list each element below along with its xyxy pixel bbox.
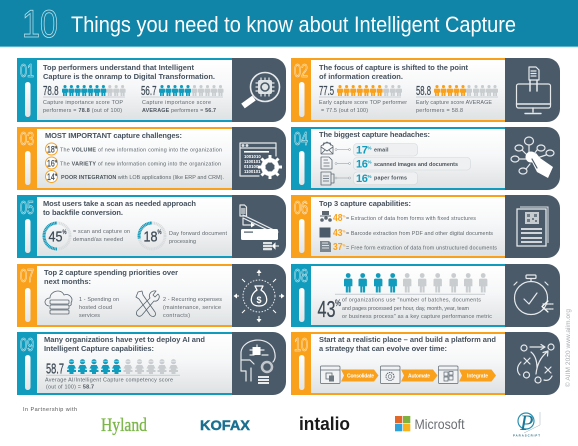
challenge 14%: POOR INTEGRATION with LOB applications (like ERP and CRM). [61,175,224,181]
donut 45% [44,223,130,249]
donut 18%: processing [169,239,196,245]
heading 07 [44,268,178,286]
headache: scanned images [321,157,470,170]
step: consolidate [320,366,378,384]
capability 48%: = Extraction of data from forms with fixed structures [346,216,476,222]
stat 58.8 pictogram: 58.8 [416,83,431,98]
challenge 18%: 18 [47,144,58,156]
capability 43%: = Barcode extraction from PDF and other digital documents [346,231,493,237]
headache: scanned images: % [367,160,372,164]
stat 77.5 pictogram: = 77.5 (out of 100) [321,108,368,114]
priority 2: wrench and screwdriver: 2 - Recurring expenses [163,297,222,303]
panel 03 [17,127,286,190]
heading 03: MOST IMPORTANT capture challenges: [45,131,182,140]
pictogram: 4.3 of 10 people [335,273,487,295]
heading 05 [43,199,196,217]
stat 43%: 43 [318,296,336,322]
step: consolidate: Consolidate [347,373,374,379]
logo: Microsoft: Microsoft [414,416,465,432]
donut 18%: 18 [144,228,158,246]
icon: code window and gear: 1100101 [244,159,261,164]
icon: hand touching nodes [511,137,554,178]
logo: Intalio: intalio [299,414,350,434]
donut 45%: demand/as needed [73,237,123,243]
priority 1: cloud services: services [79,313,100,319]
step: integrate [438,366,496,384]
challenge 18%: The VOLUME of new information coming into the organization [60,148,222,154]
donut 18% [139,223,228,249]
heading 01: Capture is the onramp to Digital Transformation. [43,72,215,81]
logo: Parascript [513,410,540,438]
capability 48%: % [342,214,346,218]
stat 43% [318,296,492,322]
stat 78.8 pictogram: performers = 78.8 (out of 100) [43,108,122,114]
icon: stopwatch [514,275,553,314]
icon: AI head [241,340,275,383]
panel 01 [17,58,286,122]
stat 58.7 robot pictogram: Average AI/Intelligent Capture competency score [45,378,173,384]
icon: strategy play diagram [518,344,554,383]
headache: scanned images: 16 [356,158,368,170]
heading 05: Most users take a scan as needed approach [43,199,196,208]
heading 06: Top 3 capture capabilities: [319,199,411,208]
stat 43%: or business process" as a key capture performance metric [342,314,492,320]
headache: email: email [374,148,389,154]
stat 58.7 robot pictogram: 58.7 [46,362,64,378]
logo: Kofax: KOFAX [200,418,250,433]
capability 43%: 43 [333,228,344,239]
panel 08 [291,264,560,327]
icon: code window and gear: 010100 [244,164,259,169]
challenge 14% [46,170,224,183]
heading 09 [44,335,205,353]
capability 48%: 48 [333,213,344,224]
panel 10: 10 [294,335,308,355]
stat 78.8 pictogram [43,83,126,114]
panel 02 [291,58,560,122]
headache: paper forms: % [367,174,372,179]
stat 58.8 pictogram: Early capture score AVERAGE [416,100,492,106]
stat 77.5 pictogram [319,83,407,114]
icon: document with QR code [517,207,548,246]
icon: scanner [240,205,279,250]
capability 37%: = Free form extraction of data from unstructured documents [346,246,497,252]
donut 45%: = scan and capture on [73,229,130,235]
stat 58.8 pictogram: performers = 58.8 [416,108,463,114]
step: integrate: Integrate [467,373,488,379]
icon: document to monitor [516,67,550,114]
priority 2: wrench and screwdriver: (maintenance, service [163,305,221,311]
stat 43%: % [335,298,341,308]
priority 1: cloud services [45,291,119,319]
challenge 16%: 16 [47,158,58,170]
logo: Parascript: P [519,410,533,435]
icon: code window and gear [240,143,282,179]
heading 05: to backfile conversion. [43,208,123,217]
title: Things you need to know about Intelligent Capture [71,12,516,37]
logo: Hyland: Hyland [101,415,147,436]
partnership label: In Partnership with [23,407,77,413]
heading 01: Top performers understand that Intelligent [43,63,194,72]
stat 56.7 pictogram: 56.7 [141,83,156,98]
icon: chip under magnifier [243,72,280,106]
headache: paper forms: 16 [356,173,368,185]
heading 07: Top 2 capture spending priorities over [44,268,178,277]
panel 01: 01 [20,61,34,81]
panel 04 [291,127,560,190]
heading 09: Intelligent Capture capabilities: [44,344,154,353]
capability 37% [320,241,497,253]
panel 07: 07 [20,266,34,286]
panel 07 [17,264,286,327]
header banner [0,0,578,47]
priority 1: cloud services: 1 - Spending on [79,297,119,303]
donut 18%: Day forward document [169,231,228,237]
heading 07: next months: [44,277,91,286]
capability 43% [320,228,493,239]
stat 58.8 pictogram [416,83,498,114]
heading 02 [319,63,468,81]
headache: email: % [367,146,372,150]
challenge 18%: % [55,146,57,150]
heading 02: of information creation. [319,72,403,81]
icon: code window and gear: 1001010 [244,154,261,159]
capability 48% [320,211,476,224]
headache: email: 17 [356,144,368,156]
stat 77.5 pictogram: Early capture score TOP performer [319,100,407,106]
headache: paper forms [321,172,418,185]
heading 10: a strategy that can evolve over time: [319,344,447,353]
panel 05: 05 [20,198,34,218]
headache: email [321,142,418,156]
priority 2: wrench and screwdriver: contracts) [163,313,190,319]
stat 56.7 pictogram: Capture importance score [142,100,211,106]
priority 1: cloud services: hosted cloud [79,305,112,311]
panel 09 [17,332,286,395]
heading 04: The biggest capture headaches: [319,130,430,139]
logo: Parascript: PARASCRIPT [513,434,540,438]
stat 43%: and pages processed per hour, day, month, year, team [342,306,470,312]
heading 10: Start at a realistic place – and build a platform and [319,335,496,344]
donut 45%: 45 [48,228,62,246]
challenge 18% [46,143,222,156]
icon: code window and gear: 1100101 [244,169,261,174]
stat 56.7 pictogram [141,83,224,114]
capability 43%: % [342,228,346,234]
priority 2: wrench and screwdriver [136,291,222,319]
challenge 14%: 14 [47,172,58,183]
headache: scanned images: scanned images and documents [374,162,458,168]
icon: money bag with arrows [234,270,284,322]
panel 09: 09 [20,335,34,355]
panel 06 [291,195,560,258]
panel 05 [17,195,286,258]
panel 08: 08 [294,266,308,286]
step: automate [380,366,438,384]
stat 77.5 pictogram: 77.5 [319,83,334,98]
stat 56.7 pictogram: AVERAGE performers = 56.7 [142,108,216,114]
panel 03: 03 [20,129,34,149]
donut 18%: % [158,230,162,236]
copyright side note: © AIIM 2020 www.aiim.org [564,309,572,387]
heading 09: Many organizations have yet to deploy AI and [44,335,205,344]
panel 10 [291,332,560,395]
big outlined number 10: 10 [22,3,58,46]
capability 37%: 37 [333,242,344,253]
stat 78.8 pictogram: 78.8 [43,83,58,98]
panel 02: 02 [294,61,308,81]
challenge 16% [46,157,221,170]
step: automate: Automate [408,373,430,379]
heading 01 [43,63,215,81]
logo: Microsoft [395,416,465,432]
donut 45%: % [62,230,67,236]
challenge 16%: The VARIETY of new information coming into the organization [60,162,221,168]
panel 04: 04 [294,129,308,149]
icon: money bag with arrows: $ [256,295,262,305]
headache: paper forms: paper forms [374,176,407,182]
stat 78.8 pictogram: Capture importance score TOP [43,100,123,106]
heading 02: The focus of capture is shifted to the point [319,63,468,72]
challenge 14%: % [55,173,57,177]
heading 10 [319,335,496,353]
panel 06: 06 [294,198,308,218]
capability 37%: % [342,242,346,248]
stat 58.7 robot pictogram: (out of 100) = 58.7 [46,384,94,390]
stat 58.7 robot pictogram [45,359,180,390]
challenge 16%: % [55,160,57,164]
stat 43%: of organizations use "number of batches, documents [342,298,481,304]
